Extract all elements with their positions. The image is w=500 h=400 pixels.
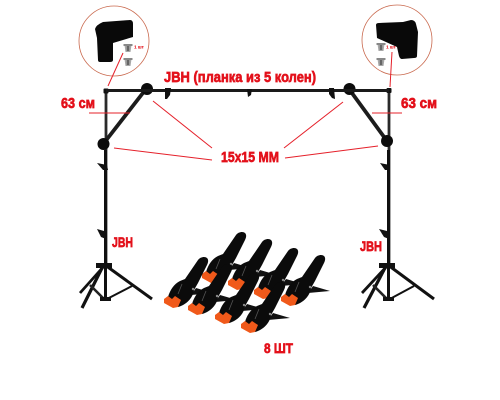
right backdrop stand	[344, 83, 434, 308]
icon: right black connector	[376, 20, 418, 59]
left backdrop stand	[80, 83, 153, 308]
icon: right adapter screws	[376, 43, 386, 66]
label: left JBH: JBH	[112, 234, 133, 250]
small quantity label left: 1 шт	[134, 44, 145, 50]
red callout lines	[89, 52, 402, 160]
label: tube size: 15х15 ММ	[221, 150, 279, 166]
label: left 63 cm: 63 см	[61, 96, 95, 112]
label: right 63 cm: 63 см	[401, 96, 437, 112]
spring clamps group	[164, 232, 330, 333]
label: right JBH: JBH	[360, 238, 382, 254]
small quantity label right: 1 шт	[386, 44, 397, 50]
icon: left black connector	[95, 20, 133, 62]
heading: bar label: JBH (планка из 5 колен)	[164, 70, 316, 86]
label: clamp quantity: 8 ШТ	[264, 340, 293, 356]
top crossbar with clips	[106, 88, 389, 99]
right detail circle	[362, 5, 432, 75]
icon: left adapter screws	[124, 44, 132, 66]
left detail circle	[79, 6, 149, 76]
